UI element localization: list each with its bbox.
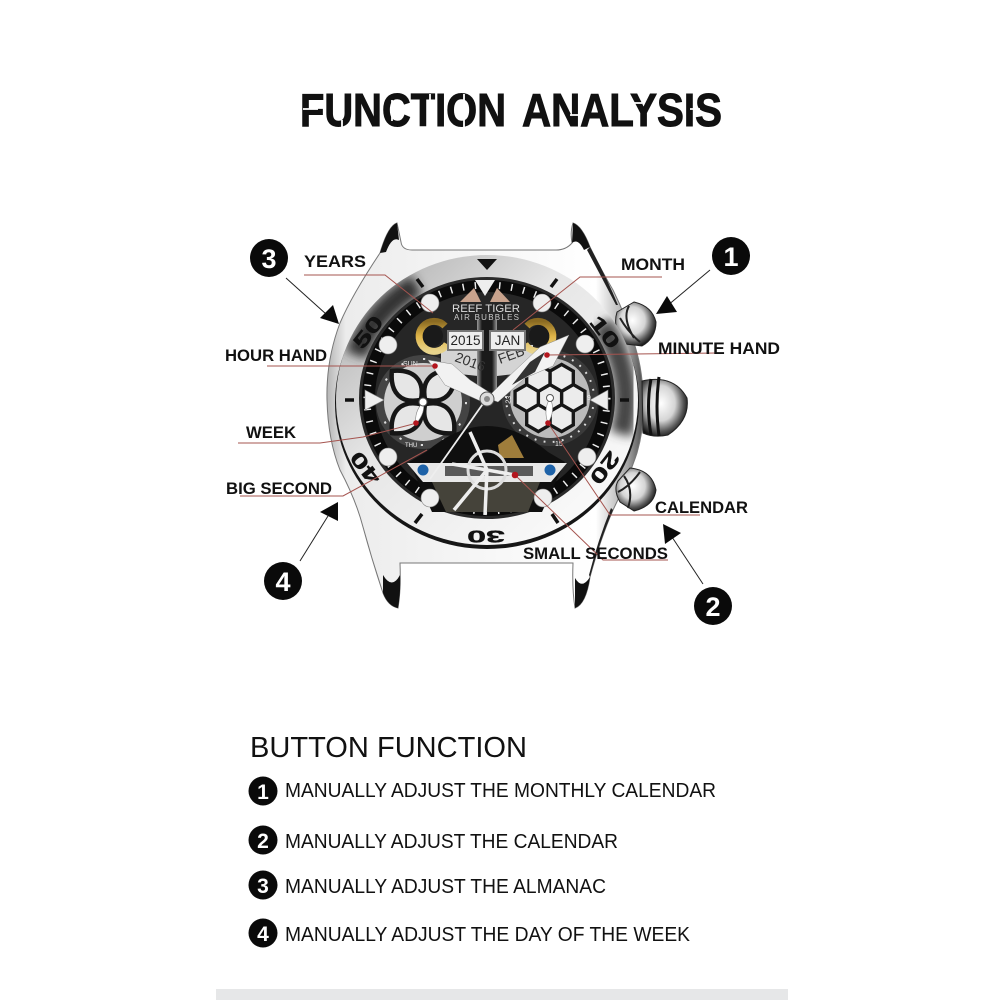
callout 4: [264, 502, 338, 600]
item 4: [248, 918, 691, 948]
callout 2: [663, 524, 732, 625]
right subdial: 9: [587, 395, 591, 402]
brand text: AIR BUBBLES: [454, 313, 519, 322]
watch case: [327, 223, 643, 608]
blue screws: [418, 464, 428, 476]
bezel numerals: 40: [345, 447, 385, 489]
brand text: [452, 303, 520, 322]
bezel tick marks: [345, 279, 629, 523]
label: minute hand: MINUTE HAND: [658, 339, 780, 358]
bezel triangle marker: [477, 259, 497, 270]
bezel numerals: [345, 311, 625, 547]
item 4: 4: [257, 923, 269, 946]
hands: [428, 335, 569, 479]
left subdial: [376, 355, 470, 449]
dial: [362, 280, 612, 516]
item 1: 1: [257, 781, 269, 804]
item 3: [248, 870, 606, 900]
callout 3: [250, 239, 339, 324]
date windows: [448, 331, 525, 350]
item 4: MANUALLY ADJUST THE DAY OF THE WEEK: [285, 924, 691, 946]
right subdial: [502, 350, 598, 448]
watch: [327, 223, 687, 608]
item 2: MANUALLY ADJUST THE CALENDAR: [285, 831, 618, 853]
watch crowns: [616, 302, 687, 511]
right subdial: 23: [505, 395, 513, 404]
callout 2: 2: [705, 592, 721, 622]
leader lines: [238, 275, 718, 560]
callout 4: 4: [275, 567, 291, 597]
dial: FEB: [496, 342, 527, 367]
item 3: MANUALLY ADJUST THE ALMANAC: [285, 876, 606, 898]
label: big second: BIG SECOND: [226, 479, 332, 498]
bezel numerals: 30: [467, 527, 505, 547]
title: ANALYSIS: [522, 84, 722, 136]
label: hour hand: HOUR HAND: [225, 346, 327, 365]
item 1: MANUALLY ADJUST THE MONTHLY CALENDAR: [285, 780, 716, 802]
top dial triangle: [475, 280, 495, 296]
label: week: WEEK: [246, 423, 297, 442]
date windows: JAN: [495, 333, 520, 348]
red pointer dots: [413, 352, 551, 478]
item 3: 3: [257, 875, 269, 898]
item 2: [248, 826, 618, 854]
label: small seconds: SMALL SECONDS: [523, 544, 668, 563]
bezel numerals: 50: [348, 311, 388, 353]
right subdial: 15: [555, 441, 563, 448]
tourbillon: [407, 426, 567, 515]
watch bezel: [335, 255, 639, 549]
left subdial: SUN: [403, 361, 418, 368]
brand text: REEF TIGER: [452, 303, 520, 315]
heading: button function: BUTTON FUNCTION: [250, 732, 527, 764]
bezel numerals: 20: [585, 447, 625, 489]
callout 1: [656, 237, 750, 314]
dial: 2016: [453, 349, 488, 375]
bottom grey band: [216, 989, 788, 1000]
central cross plate: [441, 345, 533, 392]
gold indicators: [419, 321, 553, 351]
callout 1: 1: [723, 242, 739, 272]
bezel numerals: 10: [585, 311, 625, 353]
label: month: MONTH: [621, 255, 685, 274]
label: years: YEARS: [304, 252, 366, 271]
label: calendar: CALENDAR: [655, 498, 748, 517]
callout 3: 3: [261, 244, 277, 274]
title: FUNCTION: [300, 84, 506, 136]
item 1: [248, 776, 716, 806]
lume markers: [365, 294, 608, 507]
date windows: 2015: [450, 333, 481, 348]
title: [300, 84, 722, 136]
item 2: 2: [257, 830, 269, 853]
left subdial: THU: [405, 443, 417, 449]
